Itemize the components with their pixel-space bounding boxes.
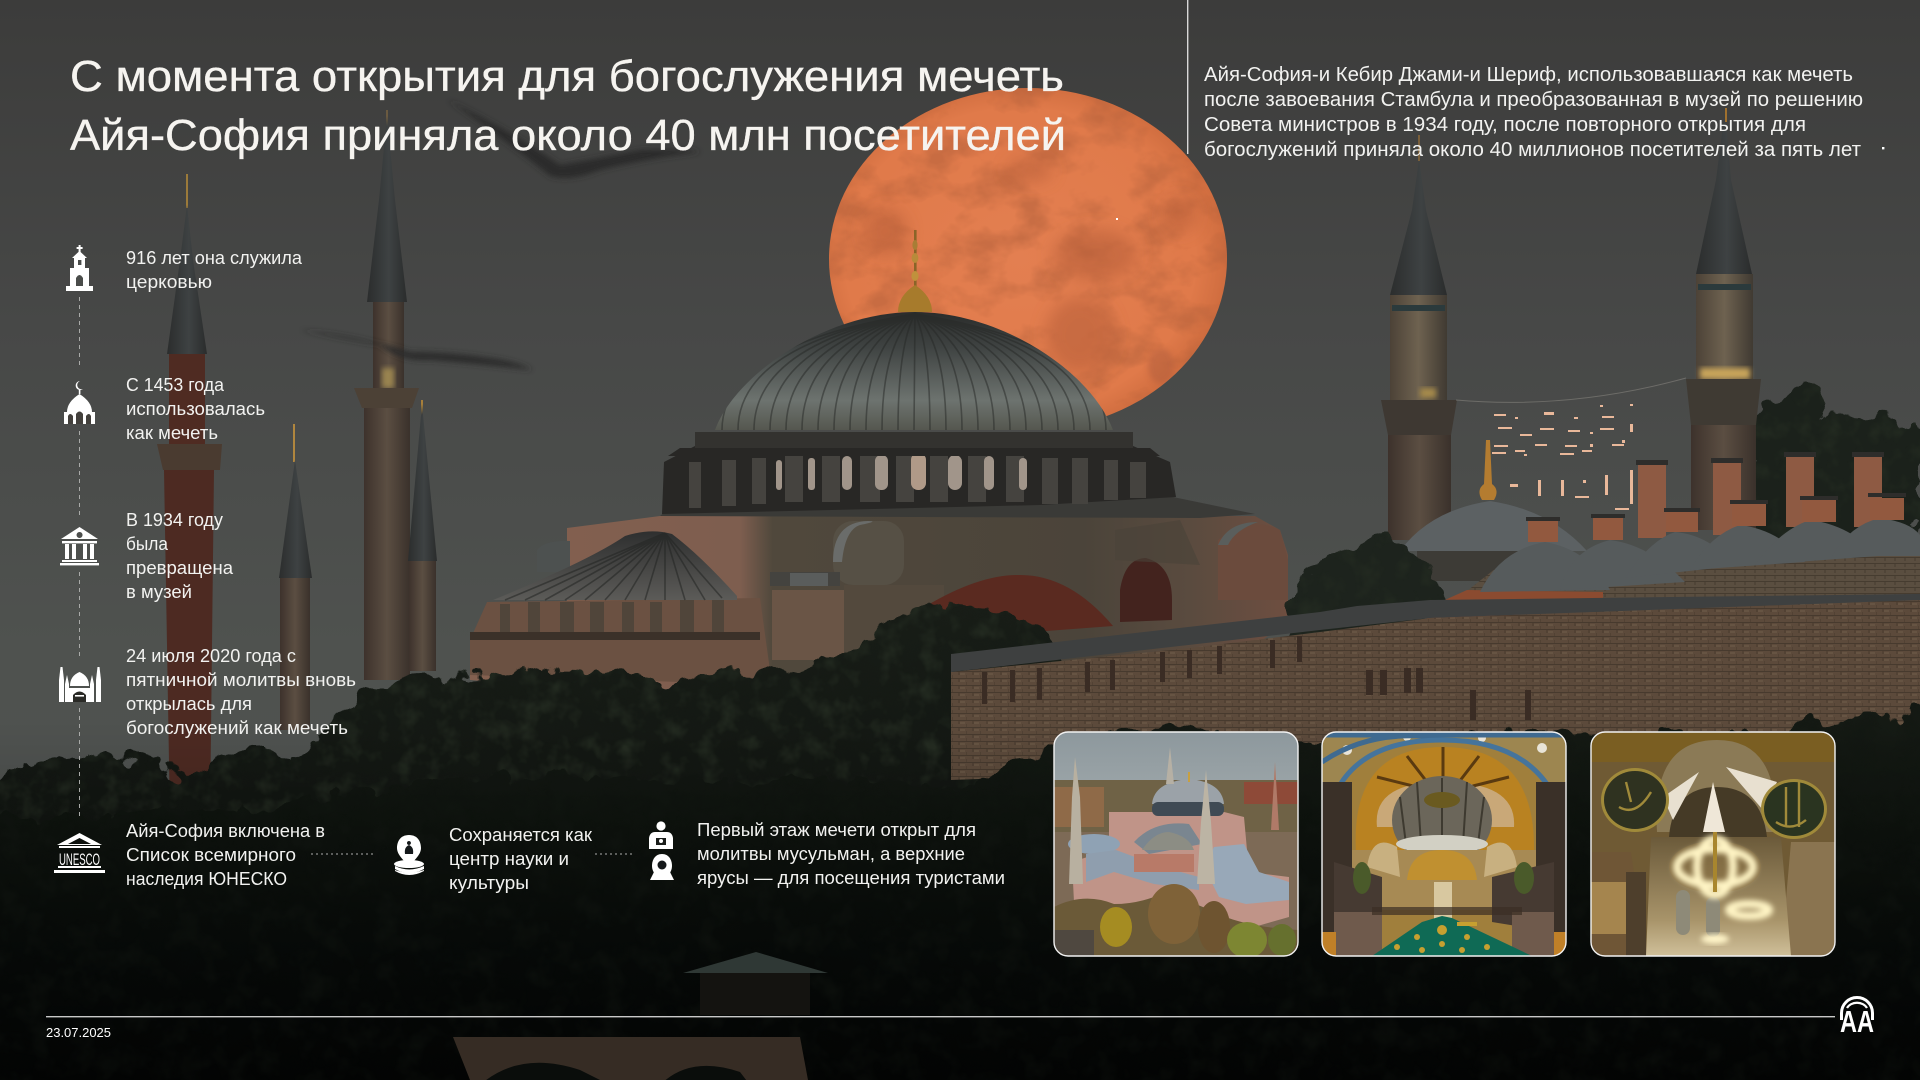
upper palace wall	[1430, 540, 1920, 620]
text: church: 916 лет она служила	[126, 248, 303, 268]
logo: AA: AA	[1840, 1004, 1874, 1039]
text: science and culture: центр науки и	[449, 849, 569, 869]
text: mosque	[126, 375, 265, 443]
darker bottom shade	[0, 720, 1920, 1080]
date: 23.07.2025	[46, 1026, 111, 1040]
palace brick wall	[951, 600, 1920, 780]
great arch	[926, 575, 1113, 640]
icon: mosque reopened	[59, 667, 101, 702]
left right-side minaret	[1381, 135, 1457, 540]
lower stone wall	[453, 1037, 808, 1080]
light garland between minarets	[1456, 378, 1686, 510]
dotted connector: UNESCO to science	[311, 853, 376, 855]
intro paragraph: после завоевания Стамбула и преобразованная в музей по решению	[1204, 89, 1863, 111]
text: mosque: С 1453 года	[126, 375, 225, 395]
middle forest in front of the mosque	[0, 602, 1080, 1080]
short chimneys	[1528, 498, 1904, 542]
text: UNESCO: наследия ЮНЕСКО	[126, 869, 287, 889]
intro paragraph: богослужений приняла около 40 миллионов посетителей за пять лет	[1204, 139, 1861, 161]
text: floors	[697, 820, 1005, 888]
intro paragraph: Совета министров в 1934 году, после повторного открытия для	[1204, 114, 1806, 136]
timeline connector	[78, 297, 80, 818]
text: reopened: открылась для	[126, 694, 252, 714]
title: Айя-София приняла около 40 млн посетителей	[70, 111, 1066, 160]
large stone minaret	[354, 110, 419, 680]
text: UNESCO	[126, 821, 325, 889]
central buttress	[772, 590, 844, 660]
walls	[470, 516, 1288, 700]
pavilion	[683, 952, 828, 1015]
small arch	[1120, 558, 1172, 622]
trees behind palace wall	[1290, 536, 1450, 680]
text: floors: Первый этаж мечети открыт для	[697, 820, 976, 840]
icon: UNESCO temple	[54, 833, 105, 873]
text: UNESCO: Айя-София включена в	[126, 821, 325, 841]
small left minaret	[279, 424, 312, 730]
text: reopened: 24 июля 2020 года с	[126, 646, 296, 666]
text: museum: превращена	[126, 558, 234, 578]
text: UNESCO: Список всемирного	[126, 845, 296, 865]
intro paragraph: Айя-София-и Кебир Джами-и Шериф, использовавшаяся как мечеть	[1204, 64, 1853, 86]
dark tree behind the right minaret	[1740, 384, 1920, 620]
text: science and culture: культуры	[449, 873, 529, 893]
icon: tourist with camera	[649, 821, 673, 849]
bird: upper	[448, 100, 700, 178]
right buttress	[1218, 524, 1288, 600]
text: museum	[126, 510, 234, 602]
medallion left	[1601, 768, 1669, 832]
palace roof	[951, 594, 1920, 672]
icon: church	[66, 245, 93, 291]
text: floors: молитвы мусульман, а верхние	[697, 844, 965, 864]
text: mosque: как мечеть	[126, 423, 218, 443]
finial	[898, 230, 932, 312]
tall chimneys	[1638, 455, 1882, 538]
medallion right	[1761, 779, 1827, 839]
bird: lower	[300, 330, 532, 370]
text: church: церковью	[126, 272, 212, 292]
small domes	[1480, 518, 1920, 592]
title	[70, 52, 1066, 160]
title: С момента открытия для богослужения мечеть	[70, 52, 1064, 101]
front forest	[0, 705, 1920, 1080]
main building	[470, 230, 1288, 700]
photo: aerial view	[1054, 732, 1298, 958]
building	[1072, 812, 1289, 927]
text: science and culture: Сохраняется как	[449, 825, 592, 845]
trees	[1054, 897, 1298, 956]
slender minaret beside the stone minaret	[408, 400, 437, 671]
icon: map pin with visitor	[650, 854, 674, 880]
side dome	[537, 541, 570, 572]
dotted connector: science to floors	[595, 853, 632, 855]
text: church	[126, 248, 303, 292]
drum	[662, 446, 1176, 514]
icon: location pin	[394, 835, 424, 875]
intro paragraph	[1204, 64, 1863, 161]
icon: mosque	[64, 381, 95, 424]
semi-dome	[493, 531, 737, 600]
text: museum: в музей	[126, 582, 192, 602]
text: floors: ярусы — для посещения туристами	[697, 868, 1005, 888]
left lower wall	[470, 598, 772, 685]
palace wall with chimneys and domes	[951, 452, 1920, 780]
photo: interior nave	[1322, 732, 1566, 956]
orange band	[1427, 590, 1603, 625]
moon	[829, 88, 1227, 416]
photo: interior chandelier	[1591, 732, 1835, 956]
footer rule	[46, 1016, 1835, 1017]
dome	[715, 312, 1113, 430]
icon: UNESCO temple: UNESCO	[59, 850, 100, 869]
red brick minaret	[157, 174, 222, 820]
chandeliers	[1672, 843, 1758, 891]
vertical divider	[1187, 0, 1188, 154]
right minarets and rear dome	[1381, 108, 1920, 620]
lower roof	[660, 497, 1255, 518]
left minarets	[157, 110, 437, 820]
text: reopened: богослужений как мечеть	[126, 718, 348, 738]
text: mosque: использовалась	[126, 399, 265, 419]
text: museum: была	[126, 534, 169, 554]
text: science and culture	[449, 825, 592, 893]
minarets	[1069, 757, 1083, 884]
drum cornice	[695, 432, 1133, 448]
logo: AA	[1840, 997, 1874, 1039]
right right-side minaret	[1686, 108, 1761, 530]
icon: museum	[60, 527, 99, 565]
rear dome	[1400, 501, 1587, 551]
text: reopened: пятничной молитвы вновь	[126, 670, 356, 690]
text: reopened	[126, 646, 356, 738]
text: museum: В 1934 году	[126, 510, 223, 530]
